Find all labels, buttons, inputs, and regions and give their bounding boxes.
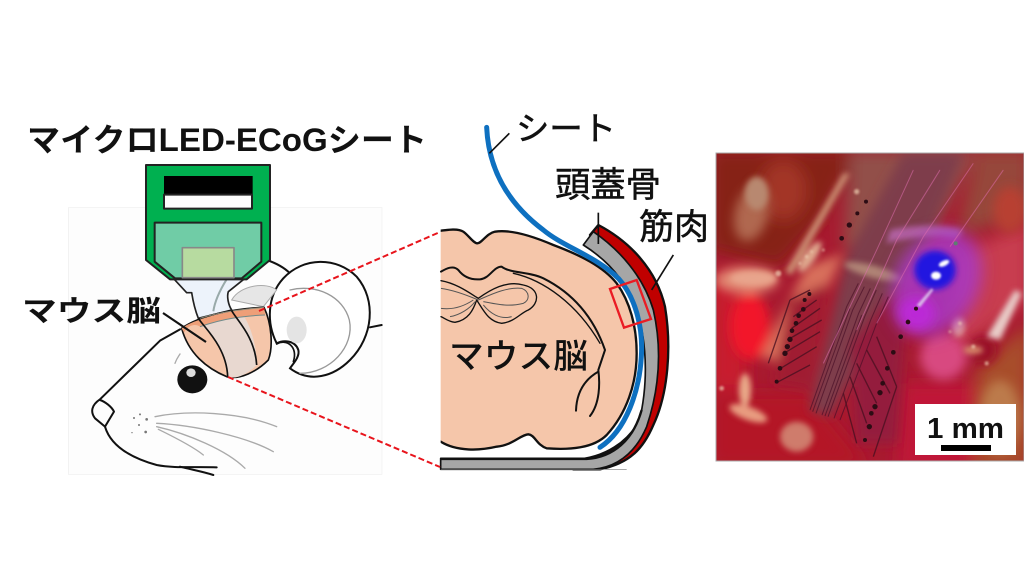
- scale bar box: [915, 404, 1016, 455]
- brain: [433, 230, 637, 450]
- electrode grid: left: [768, 290, 822, 382]
- sparkle flecks: [719, 189, 989, 391]
- muscle layer: [573, 225, 668, 469]
- red square: [610, 280, 651, 328]
- pale specular patches: [727, 173, 1022, 452]
- dashed zoom line: top: [259, 232, 440, 311]
- tissue colour regions: [710, 150, 1024, 470]
- photo frame: [716, 153, 1024, 461]
- device: micro LED-ECoG connector: [146, 165, 270, 318]
- scale bar: [941, 445, 991, 451]
- blue sheet: [487, 127, 642, 447]
- electrode dots: [775, 200, 918, 442]
- label: muscle: 筋肉: [639, 208, 709, 247]
- skull layer: [441, 232, 658, 469]
- scale label: 1 mm: [927, 413, 1004, 445]
- title: マイクロLED-ECoGシート: [27, 122, 427, 158]
- icon: mouse eye: [177, 365, 207, 393]
- mouse outline: [92, 260, 382, 475]
- photo: implanted sheet with LED: [710, 150, 1024, 470]
- icon: mouse ear: [232, 262, 370, 377]
- electrode grid: right: [843, 337, 897, 457]
- panel: brain cross-section: [430, 127, 673, 469]
- whiskers: [155, 354, 277, 468]
- icon: mouse brain exposed: [182, 307, 271, 378]
- hippocampus and inner lines: [441, 267, 605, 416]
- violet glow: [881, 220, 992, 346]
- leader lines: [489, 133, 673, 290]
- label: sheet: シート: [516, 110, 616, 147]
- panel: mouse illustration: [68, 165, 382, 475]
- central traces: [810, 283, 888, 420]
- label: mouse brain center: マウス脳: [449, 338, 588, 376]
- dashed zoom line: bottom: [228, 377, 440, 467]
- leader line: mouse brain: [163, 313, 206, 342]
- label: skull: 頭蓋骨: [555, 166, 661, 205]
- label: mouse brain left: マウス脳: [22, 296, 161, 328]
